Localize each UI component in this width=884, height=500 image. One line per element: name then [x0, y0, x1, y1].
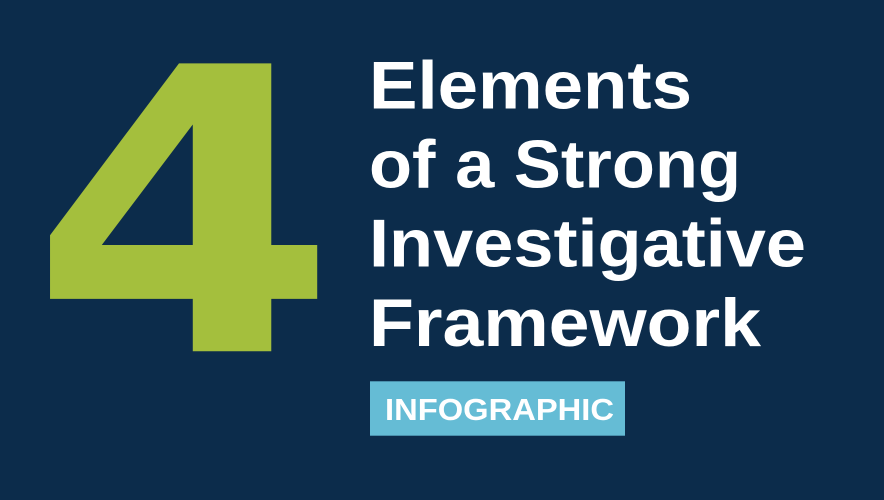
title line 4: Framework	[369, 285, 761, 361]
badge background	[370, 381, 625, 436]
title line 2: of a Strong	[369, 127, 741, 203]
badge label: INFOGRAPHIC	[385, 392, 614, 427]
title line 1: Elements	[369, 47, 692, 123]
title line 3: Investigative	[369, 206, 806, 282]
title	[369, 47, 806, 361]
infographic badge	[370, 381, 625, 436]
